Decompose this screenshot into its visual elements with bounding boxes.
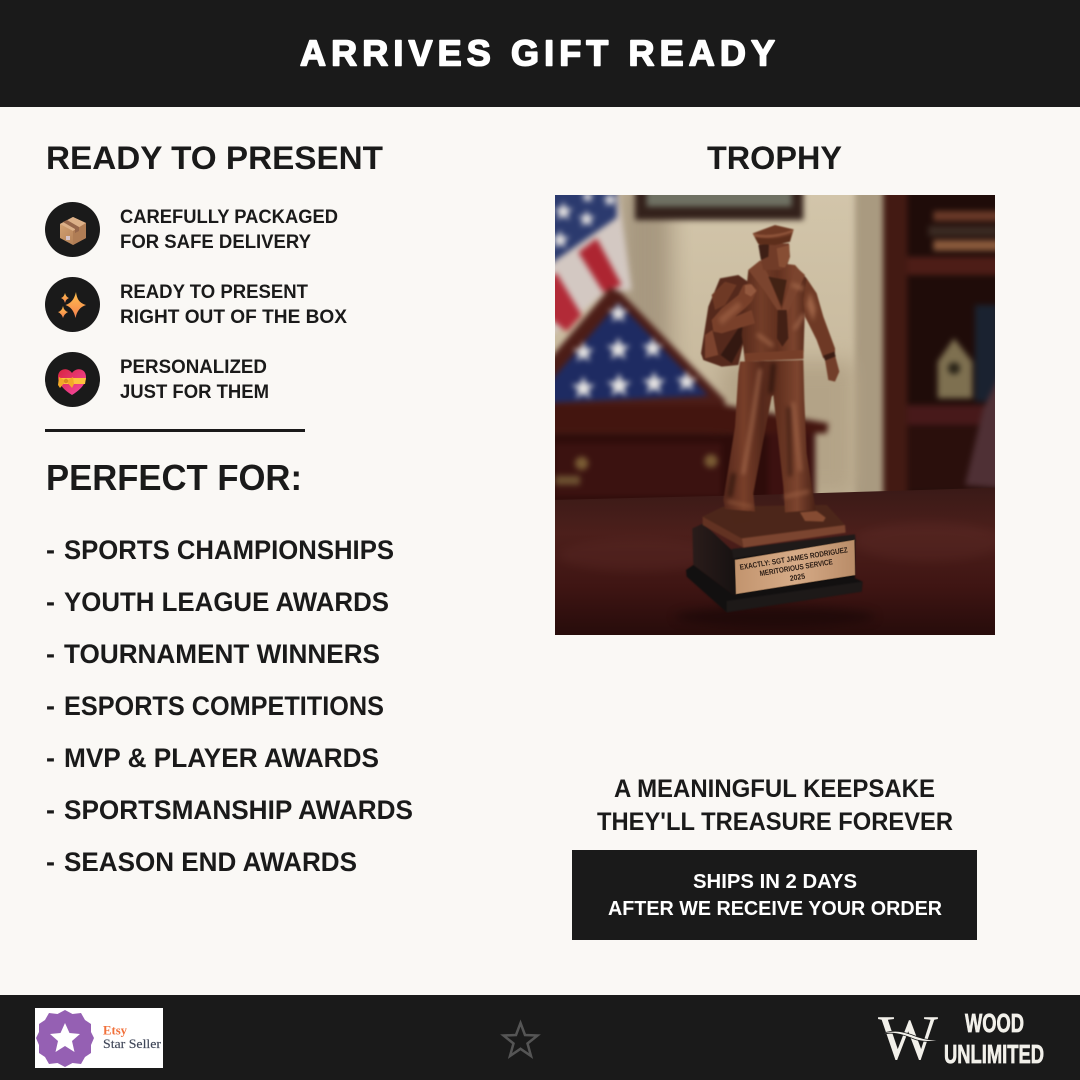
cabinet [555,402,832,500]
engraved plaque [735,540,855,594]
star outline icon [504,1023,538,1056]
title: ARRIVES GIFT READY [300,32,775,74]
list of award occasions: SEASON END AWARDS [64,847,357,877]
list of award occasions: ESPORTS COMPETITIONS [64,691,384,721]
list of award occasions: MVP & PLAYER AWARDS [64,743,379,773]
legs [723,360,816,512]
list of award occasions: - [46,847,55,877]
list of award occasions: TOURNAMENT WINNERS [64,639,380,669]
keepsake statement [597,775,953,836]
engraved plaque: 2025 [789,571,806,583]
benefit: carefully packaged: FOR SAFE DELIVERY [120,232,311,253]
list of award occasions: - [46,795,55,825]
benefit: ready to present: RIGHT OUT OF THE BOX [120,307,347,328]
american flag [555,195,634,334]
wood unlimited logo: WOOD [965,1008,1024,1038]
wood unlimited logo [878,1002,1044,1073]
etsy star seller badge: Etsy [103,1024,128,1038]
shipping callout: AFTER WE RECEIVE YOUR ORDER [608,898,943,920]
etsy star seller badge: Star Seller [103,1036,162,1051]
shipping callout [572,850,977,940]
blurred room background [555,195,995,500]
heading: trophy: TROPHY [707,140,842,176]
benefit: personalized: PERSONALIZED [120,357,267,378]
header band [0,0,1080,107]
benefit: ready to present [45,277,347,332]
bookcase [879,195,995,492]
list of award occasions [46,535,413,877]
raised arm [712,283,757,333]
list of award occasions: - [46,587,55,617]
icon: heart with ribbon [58,369,86,395]
engraved plaque: EXACTLY: SGT JAMES RODRIGUEZ [739,545,849,572]
keepsake statement: THEY'LL TREASURE FOREVER [597,808,953,836]
keepsake statement: A MEANINGFUL KEEPSAKE [614,775,935,803]
icon: sparkles [58,292,86,318]
heading: perfect for: PERFECT FOR: [46,457,302,498]
benefit: carefully packaged [45,202,338,257]
footer band [0,995,1080,1080]
list of award occasions: - [46,535,55,565]
list of award occasions: - [46,743,55,773]
torso [742,261,807,362]
head [759,243,790,270]
bronze pedestal [703,505,846,548]
bronze statue [701,225,846,548]
desk [552,488,998,638]
icon: package [60,217,86,245]
duffel bag [701,275,755,367]
list of award occasions: SPORTSMANSHIP AWARDS [64,795,413,825]
wood unlimited logo: W [878,1002,939,1073]
wall [555,195,858,494]
black trophy base [686,523,863,612]
list of award occasions: SPORTS CHAMPIONSHIPS [64,535,394,565]
benefit: personalized: JUST FOR THEM [120,382,269,403]
list of award occasions: - [46,691,55,721]
engraved plaque: MERITORIOUS SERVICE [759,557,833,578]
panel: ready to present [45,140,383,407]
picture frame [630,195,808,224]
shipping callout: SHIPS IN 2 DAYS [693,871,857,893]
list of award occasions: YOUTH LEAGUE AWARDS [64,587,389,617]
etsy star seller badge [35,1008,163,1068]
flag display case [542,288,725,408]
benefit: carefully packaged: CAREFULLY PACKAGED [120,207,338,228]
heading: ready to present: READY TO PRESENT [46,140,383,176]
benefit: personalized [45,352,269,407]
trophy photo [555,195,995,635]
sailor cap [752,224,794,242]
benefit: ready to present: READY TO PRESENT [120,282,308,303]
panel: perfect for [46,457,413,877]
list of award occasions: - [46,639,55,669]
right arm [803,278,835,358]
shoes [729,511,752,524]
